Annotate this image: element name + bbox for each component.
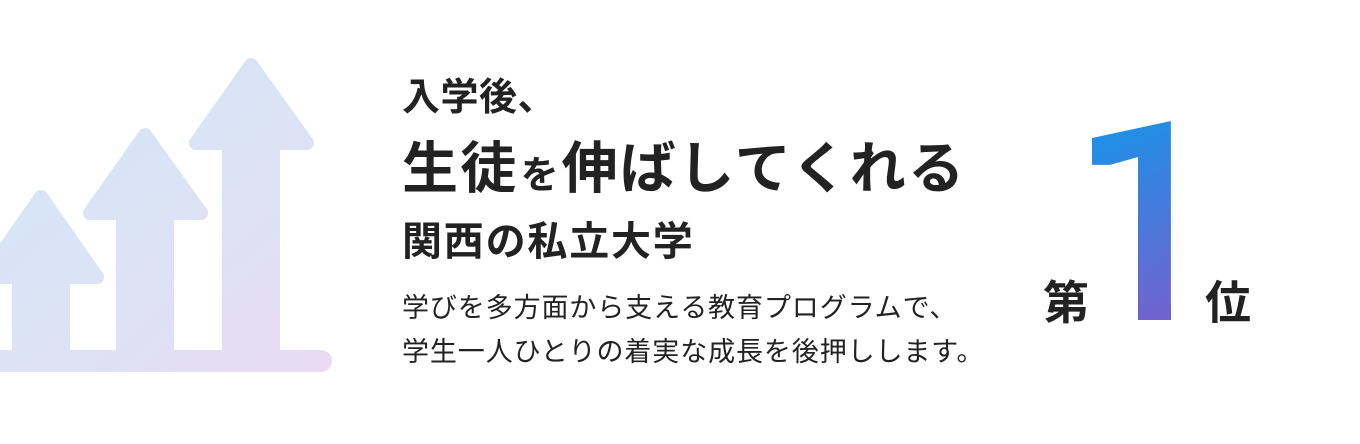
- body text: 学びを多方面から支える教育プログラムで、: [402, 286, 957, 325]
- label: 位: 位: [1205, 267, 1251, 333]
- body text: 学生一人ひとりの着実な成長を後押しします。: [402, 330, 984, 369]
- icon: three rising arrows on a baseline: [0, 58, 332, 372]
- heading line 3: 関西の私立大学: [402, 209, 695, 267]
- heading line 2: 生徒を伸ばしてくれる: [402, 124, 966, 205]
- heading line 1: 入学後、: [402, 66, 556, 121]
- body text: [402, 286, 984, 369]
- label: 第: 第: [1043, 267, 1089, 333]
- rank: first place: [1043, 121, 1251, 333]
